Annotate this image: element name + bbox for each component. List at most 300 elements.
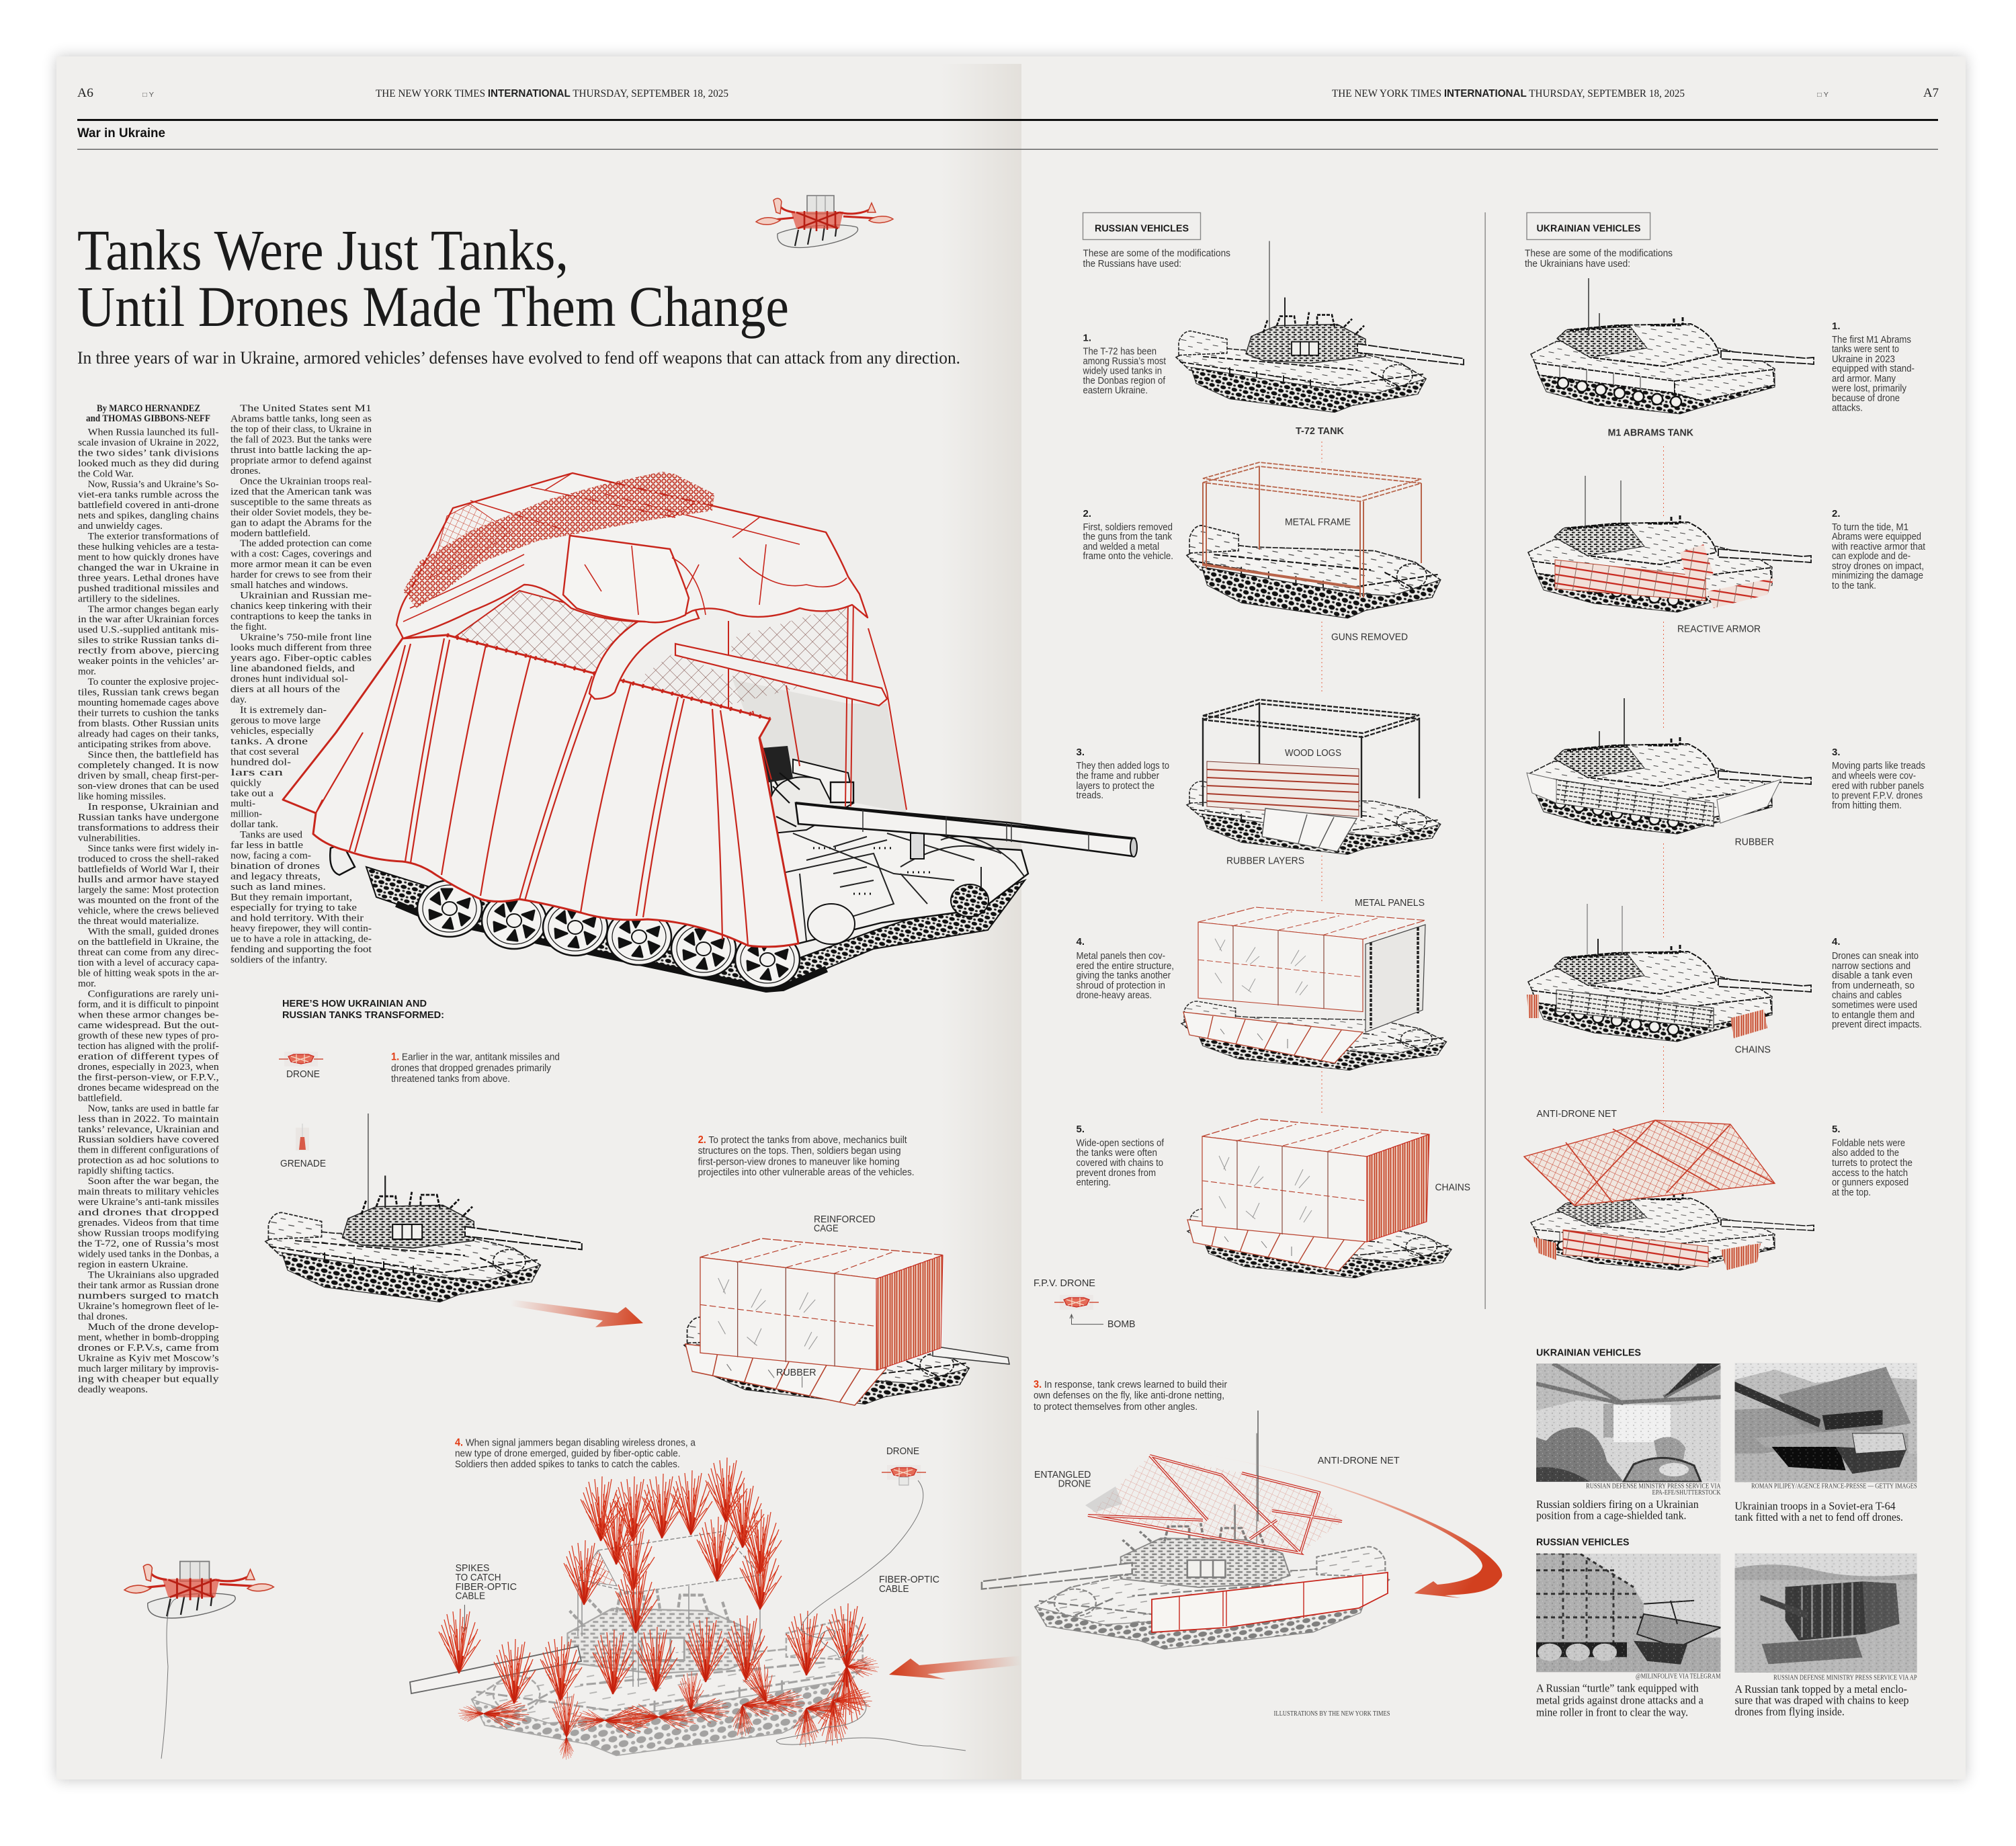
step 4 text: new type of drone emerged, guided by fiber-optic cable. bbox=[455, 1448, 681, 1459]
Ukrainian step 3 text: Moving parts like treads bbox=[1832, 760, 1925, 771]
F.P.V. drone key bbox=[1034, 1278, 1136, 1330]
article column 1: already had cages on their tanks, bbox=[78, 728, 219, 739]
article column 1: battlefield. bbox=[78, 1093, 122, 1103]
wood logs and rubber layers labels: WOOD LOGS bbox=[1285, 748, 1341, 759]
article column 2: Tanks are used bbox=[240, 830, 303, 841]
article column 1: region in eastern Ukraine. bbox=[78, 1259, 188, 1270]
article column 2: such as land mines. bbox=[230, 882, 326, 892]
photo caption 2: tank fitted with a net to fend off drones. bbox=[1735, 1511, 1903, 1523]
article column 1: The armor changes began early bbox=[88, 604, 219, 615]
article column 2: more armor mean it can be even bbox=[230, 559, 372, 570]
reinforced cage label: CAGE bbox=[814, 1224, 839, 1234]
panel: Ukrainian vehicles header bbox=[1525, 212, 1673, 269]
article column 1: changed the war in Ukraine in bbox=[78, 562, 219, 573]
step 3 text bbox=[1034, 1379, 1227, 1413]
step 2 text bbox=[698, 1134, 915, 1178]
article column 2: fending and supporting the foot bbox=[230, 944, 372, 955]
article column 1: less than in 2022. To maintain bbox=[78, 1114, 219, 1124]
Ukrainian step 2 text: Abrams were equipped bbox=[1832, 531, 1921, 542]
Ukrainian step 2 text: stroy drones on impact, bbox=[1832, 560, 1924, 572]
Ukrainian step 4 text: to entangle them and bbox=[1832, 1009, 1915, 1021]
step 2 caged tank bbox=[684, 1239, 1009, 1405]
article column 2: But they remain important, bbox=[230, 892, 352, 903]
article column 1: rectly from above, piercing bbox=[78, 646, 219, 657]
article column 2: hundred dol- bbox=[230, 757, 291, 767]
Ukrainian step 3 text: ered with rubber panels bbox=[1832, 780, 1924, 792]
byline bbox=[86, 403, 210, 424]
Russian step 5 text: prevent drones from bbox=[1077, 1167, 1156, 1179]
article column 2: vehicles, especially bbox=[230, 726, 314, 737]
Russian step 4 text: ered the entire structure, bbox=[1077, 960, 1174, 972]
article column 2: line abandoned fields, and bbox=[230, 663, 355, 674]
spikes label bbox=[456, 1563, 517, 1632]
photo caption 4: sure that was draped with chains to keep bbox=[1735, 1694, 1908, 1707]
Russian step 5 text: Wide-open sections of bbox=[1077, 1137, 1165, 1149]
reinforced cage label: REINFORCED bbox=[814, 1214, 876, 1225]
Russian step 3 text: the frame and rubber bbox=[1077, 770, 1159, 782]
article column 2: thrust into battle lacking the ap- bbox=[230, 445, 372, 456]
step 2 text: projectiles into other vulnerable areas of the vehicles. bbox=[698, 1167, 915, 1178]
step 4 text bbox=[455, 1437, 696, 1470]
drone and fiber-optic labels bbox=[879, 1446, 939, 1595]
Ukrainian step 5 text: 5. bbox=[1832, 1124, 1841, 1135]
Russian step 3 text: treads. bbox=[1077, 790, 1103, 801]
article column 1: ment, whether in bomb-dropping bbox=[78, 1332, 219, 1343]
article column 2: Ukraine’s 750-mile front line bbox=[240, 632, 372, 643]
Ukrainian tank 1: M1 Abrams bbox=[1531, 278, 1814, 414]
step 1 text: 1. Earlier in the war, antitank missiles and bbox=[391, 1052, 560, 1063]
article column 2: gan to adapt the Abrams for the bbox=[230, 517, 372, 528]
article column 1: protection as ad hoc solutions to bbox=[78, 1155, 219, 1166]
article column 2: day. bbox=[230, 694, 247, 705]
F.P.V. drone key: BOMB bbox=[1107, 1319, 1136, 1330]
road wheels bbox=[417, 880, 800, 988]
article column 1: siles to strike Russian tanks di- bbox=[78, 635, 219, 646]
drone and fiber-optic labels: DRONE bbox=[886, 1446, 919, 1457]
icon: drone key: DRONE bbox=[286, 1069, 320, 1080]
icon: drone beside title bbox=[756, 196, 893, 247]
photo credit 2: ROMAN PILIPEY/AGENCE FRANCE-PRESSE — GETTY IMAGES bbox=[1751, 1483, 1917, 1491]
Russian tank 5: chains bbox=[1187, 1119, 1452, 1278]
photo caption 4: A Russian tank topped by a metal enclo- bbox=[1735, 1683, 1907, 1695]
article column 2: looks much different from three bbox=[230, 642, 372, 653]
article column 1: ble of hitting weak spots in the ar- bbox=[78, 968, 219, 979]
article column 1: and drones that dropped bbox=[78, 1208, 219, 1218]
drone and fiber-optic labels: FIBER-OPTIC bbox=[879, 1575, 939, 1585]
article column 1: when these armor changes be- bbox=[78, 1009, 219, 1020]
photo credit 3: @MILINFOLIVE VIA TELEGRAM bbox=[1636, 1673, 1721, 1680]
Ukrainian step 2 text: can explode and de- bbox=[1832, 550, 1910, 562]
Ukrainian step 4 text: narrow sections and bbox=[1832, 960, 1910, 972]
article column 2: with a cost: Cages, coverings and bbox=[230, 549, 372, 560]
panel: Russian vehicles header: RUSSIAN VEHICLES bbox=[1095, 223, 1189, 234]
article column 1: weaker points in the vehicles’ ar- bbox=[78, 656, 219, 667]
icon: grenade key: GRENADE bbox=[280, 1159, 326, 1169]
article column 1: tanks’ relevance, Ukrainian and bbox=[78, 1124, 219, 1135]
Ukrainian step 4 text: sometimes were used bbox=[1832, 999, 1917, 1011]
dotted connector lines bbox=[1322, 442, 1664, 1116]
top tarp bbox=[396, 473, 868, 638]
article column 2: quickly bbox=[230, 778, 262, 788]
tracks bbox=[366, 867, 1025, 989]
Russian step 2 text: 2. bbox=[1083, 508, 1091, 519]
article column 1: Now, Russia’s and Ukraine’s So- bbox=[88, 479, 219, 490]
Ukrainian step 1 text: were lost, primarily bbox=[1831, 383, 1906, 394]
article column 2: susceptible to the same threats as bbox=[230, 497, 372, 507]
article column 1: largely the same: Most protection bbox=[78, 885, 219, 896]
article column 1: tiles, Russian tank crews began bbox=[78, 687, 219, 698]
article column 1: on the battlefield in Ukraine, the bbox=[78, 937, 219, 948]
article column 1: drones became widespread on the bbox=[78, 1083, 219, 1093]
article column 2: diers at all hours of the bbox=[230, 684, 340, 695]
Ukrainian step 5 text: also added to the bbox=[1832, 1147, 1899, 1159]
article column 2: drones hunt individual sol- bbox=[230, 673, 348, 684]
article column 1: viet-era tanks rumble across the bbox=[78, 489, 219, 500]
article column 1: mor. bbox=[78, 667, 96, 677]
Russian step 3 text: They then added logs to bbox=[1077, 760, 1169, 771]
Ukrainian step 4 text: prevent direct impacts. bbox=[1832, 1019, 1922, 1030]
article column 2: soldiers of the infantry. bbox=[230, 954, 327, 965]
Ukrainian step 1 text: because of drone bbox=[1832, 392, 1900, 404]
chains label right: CHAINS bbox=[1735, 1045, 1771, 1056]
icon: grenade key bbox=[280, 1124, 326, 1169]
article column 1: driven by small, cheap first-per- bbox=[78, 770, 219, 781]
Russian tank 3: wood logs bbox=[1187, 700, 1441, 855]
icon: large drone with fiber-optic cable bbox=[124, 1561, 274, 1759]
photo credit 1: EPA-EFE/SHUTTERSTOCK bbox=[1652, 1489, 1721, 1497]
Russian tank 2: metal frame bbox=[1187, 462, 1441, 618]
article column 1: widely used tanks in the Donbas, a bbox=[78, 1249, 219, 1259]
shaded interior behind turret bbox=[732, 679, 907, 813]
reinforced cage label bbox=[814, 1214, 876, 1234]
chains label: CHAINS bbox=[1435, 1183, 1470, 1193]
Abrams label: M1 ABRAMS TANK bbox=[1608, 428, 1694, 439]
drone and fiber-optic labels: CABLE bbox=[879, 1584, 909, 1595]
article column 2: million- bbox=[230, 809, 262, 820]
page header left bbox=[77, 86, 728, 100]
article column 2: dollar tank. bbox=[230, 819, 278, 830]
article column 1: Russian tanks have undergone bbox=[78, 812, 219, 823]
article column 2: Once the Ukrainian troops real- bbox=[240, 476, 372, 487]
Russian step 5 text: 5. bbox=[1077, 1124, 1085, 1135]
Russian step 4 text: Metal panels then cov- bbox=[1077, 950, 1165, 962]
article column 1: threat can come from any direc- bbox=[78, 948, 219, 958]
Russian step 4 text: drone-heavy areas. bbox=[1077, 989, 1152, 1001]
article column 2: tanks. A drone bbox=[230, 736, 308, 747]
article column 1: Soon after the war began, the bbox=[88, 1176, 219, 1187]
article column 2: now, facing a com- bbox=[230, 851, 311, 862]
Russian step 2 text: the guns from the tank bbox=[1083, 531, 1172, 542]
article column 1: much larger military by improvis- bbox=[78, 1363, 219, 1374]
article column 1: nets and spikes, dangling chains bbox=[78, 510, 219, 521]
Ukrainian step 2 text: with reactive armor that bbox=[1831, 541, 1926, 552]
lattice screens bbox=[453, 591, 848, 712]
step 1 text: drones that dropped grenades primarily bbox=[391, 1062, 551, 1074]
Russian step 4 text: shroud of protection in bbox=[1077, 980, 1165, 991]
Russian step 1 text bbox=[1083, 333, 1167, 396]
article column 1: ing with cheaper but equally bbox=[78, 1374, 219, 1384]
Russian step 5 text: the tanks were often bbox=[1077, 1147, 1157, 1159]
article column 1: vulnerabilities. bbox=[78, 833, 140, 843]
wood logs and rubber layers labels: RUBBER LAYERS bbox=[1226, 856, 1304, 867]
article column 2: The added protection can come bbox=[240, 538, 372, 549]
article column 1: the threat would materialize. bbox=[78, 916, 199, 927]
metal frame and guns removed labels bbox=[1285, 517, 1408, 643]
article column 1: To counter the explosive projec- bbox=[88, 677, 219, 687]
step 4 text: 4. When signal jammers began disabling wireless drones, a bbox=[455, 1437, 696, 1449]
Ukrainian step 1 text bbox=[1831, 321, 1915, 414]
photo credit 1: RUSSIAN DEFENSE MINISTRY PRESS SERVICE VIA bbox=[1586, 1483, 1721, 1491]
article column 2: and hold territory. With their bbox=[230, 913, 364, 923]
section rule and label: War in Ukraine bbox=[77, 126, 165, 140]
article column 2: ized that the American tank was bbox=[230, 487, 372, 497]
Russian step 4 text bbox=[1077, 936, 1174, 1001]
Russian step 5 text: covered with chains to bbox=[1077, 1157, 1163, 1169]
photo caption 1: Russian soldiers firing on a Ukrainian bbox=[1536, 1498, 1699, 1511]
article column 1: drones or F.P.V.s, came from bbox=[78, 1343, 219, 1353]
title bbox=[77, 218, 789, 339]
step 1 text bbox=[391, 1052, 560, 1085]
step 2 text: structures on the tops. Then, soldiers began using bbox=[698, 1145, 901, 1157]
article column 1: eration of different types of bbox=[78, 1051, 219, 1062]
Ukrainian step 1 text: Ukraine in 2023 bbox=[1832, 353, 1895, 365]
article column 1: With the small, guided drones bbox=[88, 927, 219, 937]
Russian step 1 text: the Donbas region of bbox=[1083, 375, 1166, 386]
spikes label: CABLE bbox=[456, 1591, 485, 1602]
article column 1: used U.S.-supplied antitank mis- bbox=[78, 625, 219, 636]
entangled drone and net labels: DRONE bbox=[1058, 1479, 1091, 1490]
panel: Russian vehicles header: These are some of the modifications bbox=[1083, 248, 1230, 259]
Russian step 4 text: giving the tanks another bbox=[1077, 970, 1171, 981]
large draped curtain bbox=[283, 635, 798, 947]
article column 2 bbox=[230, 403, 372, 965]
Russian tank 4: metal panels bbox=[1181, 907, 1446, 1071]
article column 1: transformations to address their bbox=[78, 823, 219, 833]
Ukrainian step 4 text: 4. bbox=[1832, 936, 1841, 948]
article column 1: completely changed. It is now bbox=[78, 760, 219, 771]
article column 1: scale invasion of Ukraine in 2022, bbox=[78, 437, 219, 448]
page header right: A7 bbox=[1923, 86, 1939, 100]
rubber label: RUBBER bbox=[776, 1368, 816, 1378]
photo: Ukrainian T-64 with net bbox=[1735, 1363, 1917, 1482]
arrow from step 1 to step 2 bbox=[509, 1300, 643, 1327]
photo section: Ukrainian vehicles heading: UKRAINIAN VEHICLES bbox=[1536, 1347, 1641, 1359]
panel: Russian vehicles header: the Russians have used: bbox=[1083, 258, 1181, 269]
curved support arm bbox=[589, 601, 699, 699]
Ukrainian step 3 text: 3. bbox=[1832, 747, 1841, 758]
article column 1: tion with a level of accuracy capa- bbox=[78, 958, 219, 968]
article column 1: main threats to military vehicles bbox=[78, 1187, 219, 1198]
Ukrainian step 1 text: tanks were sent to bbox=[1832, 343, 1899, 355]
photo caption 3: A Russian “turtle” tank equipped with bbox=[1536, 1682, 1699, 1695]
Ukrainian step 3 text: to prevent F.P.V. drones bbox=[1832, 790, 1923, 801]
article column 2: small hatches and windows. bbox=[230, 580, 348, 591]
panel: Russian vehicles header bbox=[1083, 212, 1230, 269]
Ukrainian tank 5: anti-drone net bbox=[1524, 1120, 1814, 1270]
divider rule between vehicle columns bbox=[1485, 212, 1486, 1309]
Ukrainian step 1 text: 1. bbox=[1832, 321, 1841, 332]
photo caption 1 bbox=[1536, 1498, 1699, 1521]
article column 2: chanics keep tinkering with their bbox=[230, 601, 372, 612]
article column 1: mounting homemade cages above bbox=[78, 698, 219, 708]
entangled drone and net labels bbox=[1034, 1456, 1400, 1490]
article column 1: Since then, the battlefield has bbox=[88, 750, 219, 761]
Russian step 1 text: widely used tanks in bbox=[1083, 366, 1162, 377]
page header left: THE NEW YORK TIMES INTERNATIONAL THURSDAY, SEPTEMBER 18, 2025 bbox=[376, 88, 728, 99]
Ukrainian step 5 text: access to the hatch bbox=[1832, 1167, 1908, 1179]
article column 1: In response, Ukrainian and bbox=[88, 802, 219, 812]
article column 2: The United States sent M1 bbox=[240, 403, 372, 414]
metal panels label: METAL PANELS bbox=[1355, 898, 1425, 909]
article column 2: It is extremely dan- bbox=[240, 705, 327, 716]
article column 1: vehicle, where the crews believed bbox=[78, 906, 219, 917]
T-72 label: T-72 TANK bbox=[1296, 426, 1345, 437]
hull front bbox=[770, 773, 1028, 944]
Ukrainian step 1 text: The first M1 Abrams bbox=[1832, 334, 1911, 345]
article column 1: Much of the drone develop- bbox=[88, 1322, 219, 1333]
subtitle: In three years of war in Ukraine, armored vehicles’ defenses have evolved to fend off weapons that can attack from any direction. bbox=[77, 348, 960, 368]
article column 2: drones. bbox=[230, 466, 261, 476]
entangled drone and net labels: ENTANGLED bbox=[1034, 1470, 1091, 1480]
illustration credit: ILLUSTRATIONS BY THE NEW YORK TIMES bbox=[1274, 1710, 1390, 1718]
page header right: □ Y bbox=[1817, 91, 1829, 99]
heading: how tanks transformed bbox=[282, 998, 444, 1021]
Russian step 3 text: layers to protect the bbox=[1077, 780, 1154, 792]
Ukrainian step 4 text: disable a tank even bbox=[1832, 970, 1913, 981]
step 4 text: Soldiers then added spikes to tanks to catch the cables. bbox=[455, 1458, 680, 1470]
Ukrainian step 1 text: attacks. bbox=[1832, 403, 1863, 414]
page header left: A6 bbox=[77, 86, 93, 100]
article column 1: troduced to cross the shell-raked bbox=[78, 853, 219, 864]
article column 1: Configurations are rarely uni- bbox=[88, 989, 219, 1000]
heading: how tanks transformed: RUSSIAN TANKS TRANSFORMED: bbox=[282, 1009, 444, 1021]
side rails bbox=[675, 644, 887, 706]
curved arrow from step 2 to step 3 bbox=[1191, 1452, 1502, 1598]
article column 2: heavy firepower, they will contin- bbox=[230, 923, 372, 934]
Russian step 2 text: and welded a metal bbox=[1083, 541, 1159, 552]
turret and sights bbox=[762, 746, 853, 833]
article column 1: came widespread. But the out- bbox=[78, 1020, 219, 1031]
Ukrainian step 5 text: turrets to protect the bbox=[1832, 1157, 1913, 1169]
Russian step 2 text: frame onto the vehicle. bbox=[1083, 550, 1173, 562]
article column 2: the fight. bbox=[230, 622, 267, 632]
article column 1: in the war after Ukrainian forces bbox=[78, 614, 219, 625]
photo caption 3: mine roller in front to clear the way. bbox=[1536, 1706, 1688, 1718]
article column 2: gerous to move large bbox=[230, 715, 321, 726]
article column 1: The exterior transformations of bbox=[88, 531, 219, 542]
article column 1: Ukraine’s homegrown fleet of le- bbox=[78, 1301, 219, 1312]
heading: how tanks transformed: HERE’S HOW UKRAINIAN AND bbox=[282, 998, 427, 1009]
article column 1 bbox=[78, 427, 220, 1395]
Ukrainian step 2 text: to the tank. bbox=[1832, 580, 1876, 591]
rear idler bbox=[330, 844, 355, 875]
Ukrainian step 4 text: chains and cables bbox=[1832, 989, 1902, 1001]
article column 2: years ago. Fiber-optic cables bbox=[230, 653, 372, 664]
article column 1: thal drones. bbox=[78, 1311, 128, 1322]
article column 1: from blasts. Other Russian units bbox=[78, 718, 219, 729]
photo caption 2: Ukrainian troops in a Soviet-era T-64 bbox=[1735, 1500, 1896, 1513]
title: Tanks Were Just Tanks, bbox=[77, 218, 569, 282]
article column 1: ment to how quickly drones have bbox=[78, 552, 219, 562]
article column 2: multi- bbox=[230, 798, 255, 809]
article column 2: the fall of 2023. But the tanks were bbox=[230, 434, 372, 445]
article column 1: were Ukraine’s anti-tank missiles bbox=[78, 1197, 219, 1208]
article column 2: Ukrainian and Russian me- bbox=[240, 591, 372, 601]
F.P.V. drone key: F.P.V. DRONE bbox=[1034, 1278, 1095, 1289]
photo caption 1: position from a cage-shielded tank. bbox=[1536, 1509, 1687, 1521]
Ukrainian step 5 text: at the top. bbox=[1832, 1187, 1871, 1198]
article column 1: the Cold War. bbox=[78, 469, 134, 480]
article column 2: modern battlefield. bbox=[230, 528, 310, 539]
Ukrainian step 3 text bbox=[1832, 747, 1925, 811]
panel: Ukrainian vehicles header: These are some of the modifications bbox=[1525, 248, 1673, 259]
article column 1: looked much as they did during bbox=[78, 458, 219, 469]
metal frame and guns removed labels: GUNS REMOVED bbox=[1331, 632, 1408, 643]
step 2 text: 2. To protect the tanks from above, mechanics built bbox=[698, 1134, 907, 1146]
photo caption 4 bbox=[1735, 1683, 1908, 1718]
article column 1: form, and it is difficult to pinpoint bbox=[78, 999, 220, 1010]
article column 1: show Russian troops modifying bbox=[78, 1228, 219, 1239]
Russian step 5 text bbox=[1077, 1124, 1165, 1188]
anti-drone net label: ANTI-DRONE NET bbox=[1536, 1109, 1617, 1120]
Ukrainian step 5 text: or gunners exposed bbox=[1832, 1177, 1908, 1188]
article column 1: Russian soldiers have covered bbox=[78, 1134, 219, 1145]
Ukrainian tank 3: rubber bbox=[1527, 698, 1811, 834]
article column 1: rapidly shifting tactics. bbox=[78, 1166, 174, 1177]
article column 2: ue to have a role in attacking, de- bbox=[230, 934, 372, 945]
Russian step 2 text bbox=[1083, 508, 1173, 562]
Ukrainian step 2 text: 2. bbox=[1832, 508, 1841, 519]
icon: drone key bbox=[279, 1052, 323, 1080]
Ukrainian step 2 text bbox=[1831, 508, 1926, 591]
article column 1: drones, especially in 2023, when bbox=[78, 1062, 219, 1073]
entangled drone and net labels: ANTI-DRONE NET bbox=[1318, 1456, 1400, 1466]
metal frame and guns removed labels: METAL FRAME bbox=[1285, 517, 1351, 528]
panel: Ukrainian vehicles header: UKRAINIAN VEHICLES bbox=[1536, 223, 1641, 234]
Russian step 3 text bbox=[1077, 747, 1169, 801]
article column 1: growth of these new types of pro- bbox=[78, 1030, 219, 1041]
article column 1: and unwieldy cages. bbox=[78, 521, 163, 532]
article column 1: When Russia launched its full- bbox=[88, 427, 219, 438]
article column 1: three years. Lethal drones have bbox=[78, 573, 219, 583]
Ukrainian step 3 text: from hitting them. bbox=[1832, 800, 1902, 811]
Russian step 1 text: 1. bbox=[1083, 333, 1091, 344]
article column 1: The Ukrainians also upgraded bbox=[88, 1270, 219, 1281]
article column 1: son-view drones that can be used bbox=[78, 781, 219, 792]
photo credit 1 bbox=[1586, 1483, 1721, 1497]
Ukrainian step 2 text: To turn the tide, M1 bbox=[1832, 521, 1908, 533]
step 2 text: first-person-view drones to maneuver like homing bbox=[698, 1156, 900, 1168]
Ukrainian tank 4: chains bbox=[1527, 904, 1811, 1042]
photo section: Russian vehicles heading: RUSSIAN VEHICLES bbox=[1536, 1537, 1629, 1548]
rear posts and right curtain bbox=[728, 598, 907, 810]
Ukrainian step 5 text bbox=[1832, 1124, 1913, 1198]
Russian step 1 text: The T-72 has been bbox=[1083, 346, 1157, 358]
article column 1: mor. bbox=[78, 978, 96, 989]
article column 2: contraptions to keep the tanks in bbox=[230, 612, 372, 622]
article column 2: Abrams battle tanks, long seen as bbox=[230, 414, 372, 425]
Ukrainian step 4 text: Drones can sneak into bbox=[1832, 950, 1919, 962]
photo credit 4: RUSSIAN DEFENSE MINISTRY PRESS SERVICE VIA AP bbox=[1773, 1675, 1917, 1682]
page header right: THE NEW YORK TIMES INTERNATIONAL THURSDAY, SEPTEMBER 18, 2025 bbox=[1332, 88, 1685, 99]
article column 1: hulls and armor have stayed bbox=[78, 874, 219, 885]
step 3 text: to protect themselves from other angles. bbox=[1034, 1401, 1198, 1413]
article column 2: especially for trying to take bbox=[230, 903, 357, 913]
spikes label: TO CATCH bbox=[456, 1572, 501, 1583]
gun barrel bbox=[796, 803, 1137, 857]
article column 1: them in different configurations of bbox=[78, 1145, 219, 1156]
article column 2: propriate armor to defend against bbox=[230, 455, 372, 466]
